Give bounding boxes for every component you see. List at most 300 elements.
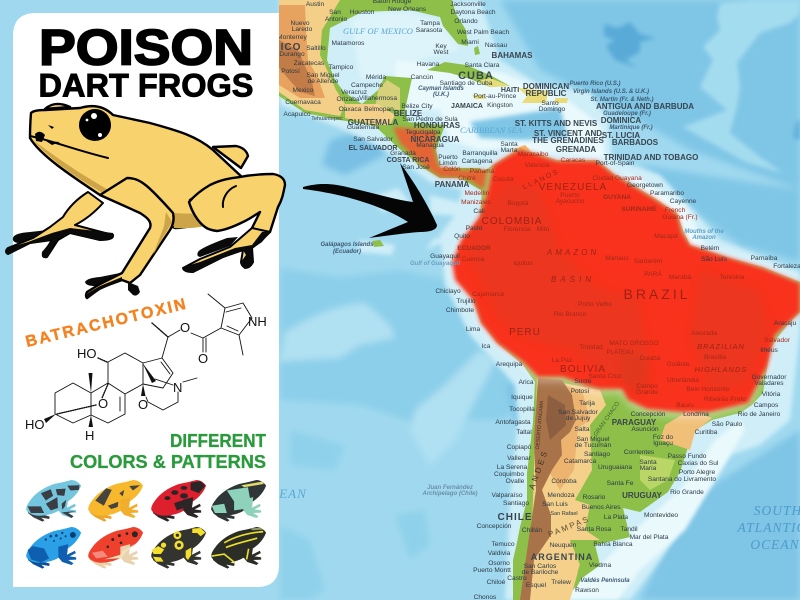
map labels: Londrina	[683, 411, 709, 418]
map labels: BASIN	[551, 275, 595, 284]
map labels: São Luís	[701, 256, 728, 263]
map labels: EAN	[278, 486, 307, 501]
map labels: Puerto	[560, 192, 580, 199]
map labels: Chiclayo	[435, 288, 461, 295]
body	[30, 106, 243, 228]
map labels: Arica	[518, 379, 534, 386]
map labels: Passo Fundo	[668, 453, 707, 460]
map labels: West Palm Beach	[457, 29, 509, 36]
heading: different colors and patterns: DIFFERENT	[170, 431, 266, 451]
map labels: Porto Alegre	[679, 469, 715, 476]
molecule atom labels: O	[198, 351, 208, 366]
map labels: Caracas	[561, 157, 586, 164]
map labels: Villahermosa	[359, 95, 397, 102]
map labels: Ciudad Guayana	[592, 175, 642, 182]
map labels: Rio de Janeiro	[738, 411, 781, 418]
map labels: Fortaleza	[773, 263, 800, 270]
map labels: Port-of-Spain	[596, 160, 635, 167]
map labels: San Luis	[542, 501, 569, 508]
map labels: PARÁ	[644, 269, 662, 278]
map labels: Bogotá	[508, 200, 529, 207]
near hind foot	[183, 228, 270, 273]
heading: batrachotoxin: BATRACHOTOXIN	[24, 296, 187, 351]
molecule: batrachotoxin structure	[44, 294, 252, 427]
map labels: Trujillo	[456, 298, 476, 305]
map labels: Manizales	[461, 199, 492, 206]
map labels: Trinidad	[579, 344, 603, 351]
map labels: Campo	[636, 383, 658, 390]
map labels: Valencia	[525, 162, 550, 169]
map labels: Campos	[754, 402, 779, 409]
map labels: Manaus	[605, 255, 629, 262]
map labels: ANDES	[527, 448, 550, 491]
map labels: ICO	[281, 42, 301, 53]
map labels: Cayman Islands	[418, 86, 465, 92]
map labels: Santana do Livramento	[648, 476, 716, 483]
map labels: New Orleans	[388, 6, 427, 13]
map labels: Valdés Peninsula	[580, 578, 630, 584]
map labels: COLOMBIA	[482, 216, 542, 227]
map labels: Esquel	[526, 582, 547, 589]
map labels: Paramaribo	[650, 190, 684, 197]
map labels: La Serena	[497, 464, 528, 471]
map labels: Ica	[482, 343, 491, 350]
map labels: Osorno	[488, 560, 510, 567]
map labels: Maracaibo	[518, 151, 549, 158]
map labels: Ilhéus	[760, 347, 778, 354]
map labels: Santarém	[634, 258, 663, 265]
map labels: Castro	[507, 575, 527, 582]
map labels: PARAGUAY	[612, 418, 657, 427]
map labels: Domingo	[539, 106, 566, 113]
map labels: Rawson	[575, 587, 599, 594]
map labels: Cancún	[411, 74, 434, 81]
near thigh	[189, 174, 285, 232]
map labels: ST. VINCENT AND	[534, 129, 602, 138]
molecule atom labels	[25, 314, 267, 443]
map labels: Nuevo	[290, 20, 310, 27]
frog: red with cream belly	[88, 527, 143, 569]
map labels: HONDURAS	[414, 121, 461, 130]
map labels: Monterrey	[277, 34, 308, 41]
map labels: BAHAMAS	[492, 51, 533, 60]
map labels: Sucre	[574, 378, 592, 385]
map labels: DESERTO ATACAMA	[535, 400, 545, 449]
map labels: Rio Grande	[670, 489, 704, 496]
map labels: Maria	[640, 465, 657, 472]
map labels: Foz do	[653, 434, 673, 441]
map labels: Managua	[416, 142, 444, 149]
map labels: Iquitos	[513, 260, 533, 267]
map labels: Santiago de Cuba	[440, 80, 493, 87]
map labels: Valparaíso	[491, 492, 523, 499]
map labels: Chitré	[458, 175, 476, 182]
map labels: Martinique (Fr.)	[609, 125, 653, 131]
map labels: de Jujuy	[566, 415, 591, 422]
map labels: Viedma	[589, 562, 611, 569]
map labels: de Bariloche	[522, 569, 559, 576]
frog: blue and black	[26, 480, 81, 522]
map labels: Chiloé	[487, 579, 506, 586]
map labels: Parnaíba	[751, 255, 778, 262]
map labels: Rio Branco	[554, 311, 587, 318]
map labels: Caxias do Sul	[678, 460, 719, 467]
map labels: Uruguaiana	[598, 464, 632, 471]
map labels: VENEZUELA	[539, 182, 607, 193]
pale continental shelf	[280, 0, 800, 600]
map labels: Mouths of the	[684, 229, 724, 235]
map labels: Taltal	[516, 429, 532, 436]
map labels: Trelew	[551, 579, 571, 586]
map labels: Ayacucho	[556, 198, 585, 205]
map labels: Chillán	[522, 527, 542, 534]
map labels: Saltillo	[306, 45, 326, 52]
heading: different colors and patterns: COLORS & PATTERNS	[70, 452, 266, 472]
map labels: REPUBLIC	[526, 89, 567, 98]
map labels: San Pedro de Sula	[402, 116, 458, 123]
map labels: Neuquén	[550, 542, 577, 549]
map labels: Medellín	[465, 190, 490, 197]
map labels: OCEAN	[750, 537, 800, 552]
map labels: Mendoza	[547, 492, 575, 499]
map labels: Cartagena	[462, 158, 493, 165]
frog: orange and black	[88, 480, 143, 522]
map labels: Arequipa	[496, 361, 523, 368]
map labels: Corrientes	[624, 449, 655, 456]
map labels: Puerto Rico (U.S.)	[569, 81, 621, 87]
map labels: San José	[402, 164, 430, 171]
map labels: Grande	[636, 389, 658, 396]
white info panel	[6, 13, 285, 587]
map labels: CARIBBEAN SEA	[460, 125, 523, 135]
map labels: Oaxaca	[339, 106, 362, 113]
map labels: Antofagasta	[495, 419, 531, 426]
map labels: PERU	[509, 327, 541, 338]
map labels: Rosario	[583, 494, 606, 501]
map labels: Bahía Blanca	[593, 541, 633, 548]
map labels: Montevideo	[644, 512, 678, 519]
map labels: Santa Clara	[465, 62, 500, 69]
map labels: Virgin Islands (U.S. & U.K.)	[573, 89, 649, 95]
map labels: Guiana (Fr.)	[662, 214, 698, 221]
map labels: Concepción	[631, 411, 666, 418]
map labels: Mitú	[537, 226, 550, 233]
map labels: TRINIDAD AND TOBAGO	[604, 153, 698, 162]
map labels: Santa Fe	[607, 480, 634, 487]
map labels: Panamá	[470, 168, 495, 175]
map labels: Kingston	[487, 102, 513, 109]
map labels: BELIZE	[394, 109, 423, 118]
map labels: West	[434, 49, 449, 56]
map labels: Tandil	[620, 526, 638, 533]
map labels: de Tucumán	[575, 442, 611, 449]
map labels: GRAN CHACO	[593, 401, 621, 438]
map labels: (Ecuador)	[333, 249, 361, 255]
map labels: Uberlândia	[667, 377, 699, 384]
map labels: Governador	[752, 374, 787, 381]
map labels: Porto Velho	[578, 301, 612, 308]
molecule atom labels: H	[85, 428, 94, 443]
map labels: Marta	[501, 147, 518, 154]
map labels: French	[665, 207, 686, 214]
map labels: Tegucigalpa	[405, 129, 441, 136]
molecule atom labels: O	[180, 320, 190, 335]
map labels: Puerto	[438, 154, 458, 161]
map labels: Vallenar	[507, 455, 532, 462]
map labels: Tehuantepec	[311, 116, 343, 122]
map labels: Alvorada	[691, 330, 717, 337]
map labels: Cali	[473, 208, 485, 215]
map labels: Vitória	[762, 391, 781, 398]
title	[38, 20, 253, 104]
frog: black with yellow stripes	[211, 527, 266, 569]
map labels: Tarija	[579, 400, 595, 407]
map labels: CHILE	[498, 512, 532, 523]
map labels: Iguaçu	[653, 440, 673, 447]
map labels: Belo Horizonte	[686, 386, 730, 393]
map labels: Salvador	[764, 337, 791, 344]
map labels: São Paulo	[712, 421, 743, 428]
molecule atom labels: O	[138, 397, 148, 412]
map labels: Cuenca	[462, 256, 485, 263]
far hind leg bump	[213, 146, 248, 168]
eye	[79, 109, 111, 141]
map labels: Daytona Beach	[450, 9, 496, 16]
map land: South America	[455, 148, 800, 600]
map labels: Quito	[454, 233, 470, 240]
map labels: Cuiabá	[640, 355, 661, 362]
map labels: DOMINICA	[601, 116, 641, 125]
far front leg	[6, 192, 113, 258]
arrow	[303, 163, 437, 238]
map labels: Santa Rosa	[577, 526, 612, 533]
map labels: PLATEAU	[607, 350, 633, 356]
molecule atom labels: NH	[248, 314, 267, 329]
map labels: Ribeirão Preto	[704, 396, 746, 403]
map labels: San Rafael	[550, 511, 578, 517]
map labels: Juan Fernández	[427, 485, 473, 491]
map labels: ECUADOR	[457, 245, 491, 252]
map labels: San Miguel	[576, 436, 610, 443]
title: DART FROGS	[38, 68, 253, 104]
map labels: Zacatecas	[294, 60, 325, 67]
map labels: Temuco	[491, 541, 515, 548]
map labels: San Miguel	[306, 72, 340, 79]
map labels: La Plata	[604, 514, 628, 521]
map labels: Mexico	[293, 87, 314, 94]
map labels: Port-au-Prince	[474, 93, 517, 100]
map labels: Cajamarca	[472, 291, 504, 298]
map labels: Matamoros	[332, 40, 365, 47]
near front leg	[85, 273, 120, 286]
map labels: St. Martin (Fr. & Neth.)	[590, 97, 654, 103]
map labels: ST. KITTS AND NEVIS	[515, 119, 598, 128]
map labels: Teresina	[720, 274, 745, 281]
map labels: Santa	[500, 141, 518, 148]
map labels: CUBA	[458, 70, 494, 82]
map labels: Guayaquil	[430, 253, 460, 260]
map labels: Limón	[439, 160, 457, 167]
map labels: Galápagos Islands	[320, 242, 374, 248]
map labels: Iquique	[511, 394, 533, 401]
map labels: Potosí	[571, 388, 590, 395]
map labels: Mérida	[366, 74, 386, 81]
map labels: Laredo	[292, 26, 313, 33]
map labels: Georgetown	[627, 182, 663, 189]
heading: different colors and patterns	[70, 431, 266, 472]
map labels: Santa	[639, 459, 657, 466]
frog variety grid	[26, 480, 266, 569]
molecule atom labels: N	[173, 380, 182, 395]
map land: North and Central America, Caribbean	[279, 0, 568, 247]
map labels: Pasto	[466, 225, 483, 232]
map labels: Coquimbo	[494, 471, 524, 478]
map labels: Key	[435, 43, 447, 50]
map labels: ST. LUCIA	[602, 131, 640, 140]
map labels: Tampa	[420, 20, 440, 27]
map labels: Santiago	[503, 500, 529, 507]
map labels: Tocopilla	[509, 406, 535, 413]
frog: red and black	[151, 480, 206, 522]
map labels: Valdivia	[488, 550, 511, 557]
map labels: Puerto Montt	[473, 567, 511, 574]
map labels: ARGENTINA	[531, 552, 593, 562]
map labels: Orizaba	[336, 96, 360, 103]
map labels: GULF OF MEXICO	[343, 26, 413, 36]
map labels: Santa Cruz	[588, 373, 622, 380]
map labels: Sarasota	[416, 27, 443, 34]
map labels: Guatemala	[347, 124, 379, 131]
map labels: BARBADOS	[612, 138, 659, 147]
map labels: Havana	[417, 61, 440, 68]
title: POISON	[39, 20, 253, 76]
map labels: Chimbote	[446, 307, 474, 314]
map labels: Durango	[279, 51, 305, 58]
map labels: Salta	[574, 426, 590, 433]
map labels: EL SALVADOR	[348, 145, 398, 152]
map labels: HIGHLANDS	[695, 365, 747, 374]
map labels: Antonio	[325, 16, 348, 23]
molecule atom labels: HO	[77, 346, 96, 361]
map labels: Archipelago (Chile)	[421, 491, 478, 497]
map labels: Lima	[466, 326, 480, 333]
map labels: La Paz	[552, 357, 572, 364]
map labels: Austin	[306, 1, 324, 8]
red range overlay	[393, 127, 800, 416]
map labels: SURINAME	[621, 206, 657, 213]
map labels: GUYANA	[603, 194, 631, 201]
map labels: LLANOS	[522, 168, 561, 191]
map labels: Acapulco	[283, 111, 311, 118]
map labels: URUGUAY	[622, 491, 663, 500]
map labels: Santiago	[584, 451, 610, 458]
map labels: Guadeloupe (Fr.)	[603, 111, 651, 117]
map labels: Goiânia	[667, 361, 690, 368]
map labels: Colón	[443, 166, 461, 173]
map labels: Mar del Plata	[630, 534, 669, 541]
molecule atom labels: O	[98, 396, 108, 411]
map labels: San Carlos	[524, 563, 557, 570]
map labels: Belize City	[401, 103, 433, 110]
map labels: GRENADA	[556, 145, 596, 154]
map labels: Belém	[701, 245, 720, 252]
map labels: Tampico	[329, 64, 354, 71]
map labels: Catamarca	[564, 458, 596, 465]
map labels: s Potosí	[276, 68, 300, 75]
frog: mint and black	[211, 480, 266, 522]
frog: cobalt blue	[26, 527, 81, 569]
map labels: Córdoba	[551, 478, 577, 485]
map labels: Orlando	[454, 18, 478, 25]
map labels: Curitiba	[695, 429, 718, 436]
map labels: Amazon	[691, 235, 716, 241]
map labels: Buenos Aires	[582, 504, 621, 511]
map labels: Veracruz	[341, 89, 367, 96]
map labels: BOLIVIA	[560, 364, 606, 375]
map labels: BRAZILIAN	[697, 342, 745, 351]
map labels: Macapá	[654, 233, 678, 240]
illustration: golden poison frog	[6, 104, 285, 299]
map labels: NICARAGUA	[411, 135, 460, 144]
map labels: Cayenne	[670, 198, 697, 205]
map labels: Jacksonville	[450, 1, 486, 8]
map labels: San	[329, 9, 341, 16]
map labels: MATO GROSSO	[609, 340, 659, 347]
map labels: Miami	[461, 39, 479, 46]
molecule atom labels: HO	[25, 417, 44, 432]
map labels: Aracaju	[774, 320, 797, 327]
map labels: Ovalle	[506, 478, 525, 485]
map labels: San Salvador	[558, 409, 599, 416]
map labels: Granada	[390, 150, 416, 157]
frog: yellow spots on black	[151, 527, 206, 569]
map labels: Gulf of Guayaquil	[410, 261, 460, 267]
far eye ridge	[45, 104, 70, 109]
map labels: Barranquilla	[462, 150, 498, 157]
map labels: Cuernavaca	[285, 99, 321, 106]
map labels: Copiapó	[507, 444, 532, 451]
map labels: Concepción	[477, 523, 512, 530]
map labels: THE GRENADINES	[532, 136, 604, 145]
map labels: Houston	[350, 9, 375, 16]
map labels: de Allende	[308, 78, 339, 85]
map labels: PANAMA	[435, 180, 469, 189]
map labels: AMAZON	[546, 248, 599, 257]
map labels: (U.K.)	[433, 92, 449, 98]
map labels: DOMINICAN	[523, 82, 569, 91]
map labels: Campeche	[351, 82, 383, 89]
map labels: JAMAICA	[451, 103, 483, 110]
map labels: Asunción	[631, 426, 659, 433]
map labels: Marabá	[669, 274, 692, 281]
map labels: Brasília	[704, 354, 726, 361]
map labels: Cúcuta	[493, 176, 514, 183]
map labels: PAMPAS	[547, 514, 591, 539]
map labels: Bauru	[676, 402, 694, 409]
map labels: San Salvador	[353, 136, 394, 143]
map labels: COSTA RICA	[387, 157, 429, 164]
map labels: Florencia	[503, 226, 531, 233]
map labels: HAITI	[501, 87, 519, 94]
map labels: Belmopan	[364, 106, 394, 113]
map labels	[276, 0, 800, 600]
map labels: BRAZIL	[623, 286, 691, 302]
map labels: Valadares	[754, 380, 784, 387]
map labels: Santo	[541, 100, 559, 107]
map labels: GUATEMALA	[348, 118, 398, 127]
map labels: Nassau	[485, 42, 508, 49]
map labels: ANTIGUA AND BARBUDA	[596, 102, 694, 111]
